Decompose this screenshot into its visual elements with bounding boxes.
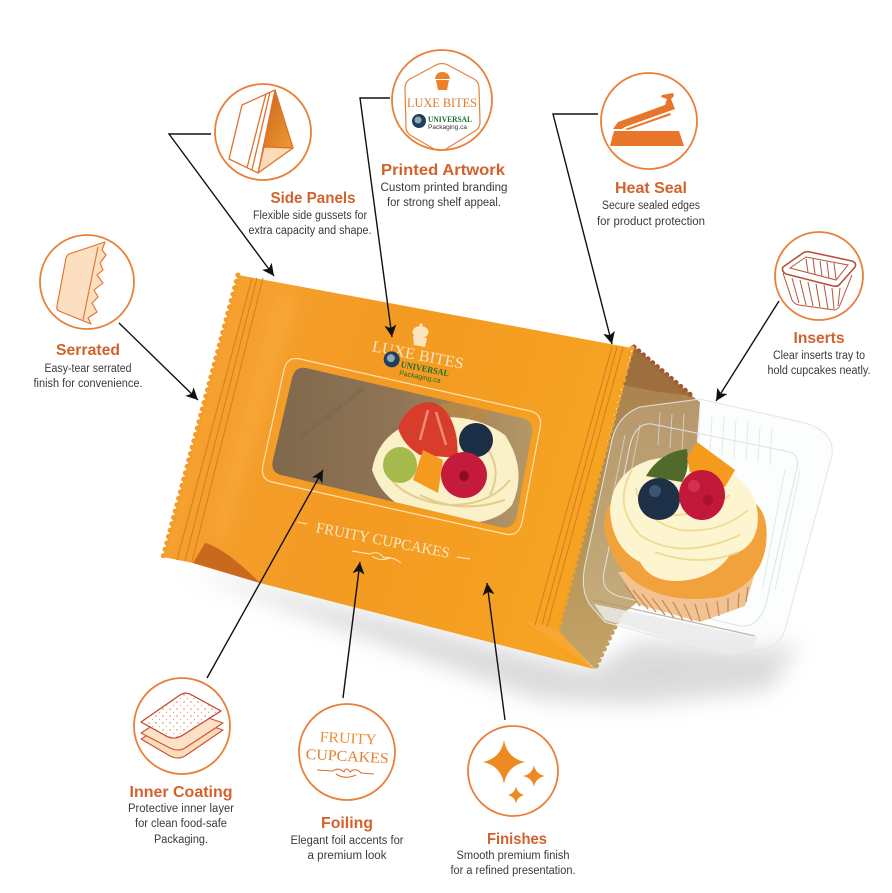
icon: label: UNIVERSAL: [428, 115, 472, 124]
bag universal logo: [381, 350, 451, 386]
description: for clean food-safe: [135, 818, 227, 830]
raspberry: [679, 470, 725, 520]
description: Flexible side gussets for: [253, 210, 367, 222]
bag universal logo: Packaging.ca: [398, 370, 441, 385]
product: bag and tray illustration: [163, 275, 832, 705]
description: Smooth premium finish: [456, 850, 570, 862]
description: for strong shelf appeal.: [387, 197, 501, 209]
icon circle: [392, 50, 492, 150]
bag flourish: [352, 551, 401, 563]
description: Packaging.: [154, 834, 208, 846]
folded corner left: [193, 543, 260, 583]
window: [272, 368, 532, 528]
callout: Serrated: [34, 235, 142, 390]
callout: Inserts: [768, 232, 870, 377]
bag universal logo: UNIVERSAL: [400, 359, 450, 378]
arrow: side panels: [169, 134, 274, 276]
icon circle: [40, 235, 134, 329]
description: Elegant foil accents for: [290, 835, 404, 847]
icon: side gusset: [229, 90, 293, 173]
icon circle: [468, 726, 558, 816]
description: Easy-tear serrated: [44, 363, 132, 375]
heading: Inserts: [794, 330, 845, 347]
callout: Printed Artwork: [380, 50, 508, 209]
icon circle: [134, 678, 230, 774]
wrapper: [618, 566, 757, 622]
icon: label: LUXE BITES: [407, 96, 477, 110]
heading: Heat Seal: [615, 180, 687, 197]
icon circle: [215, 84, 311, 180]
arrow: finishes: [487, 583, 505, 720]
grape: [383, 447, 417, 483]
mango: [687, 442, 735, 487]
folded corner right: [520, 618, 594, 669]
heading: Serrated: [56, 342, 120, 359]
description: for product protection: [597, 216, 705, 228]
description: for a refined presentation.: [450, 865, 576, 877]
serrated left edge: [163, 275, 238, 557]
heading: Foiling: [321, 815, 373, 832]
icon: foil text: FRUITY: [319, 730, 377, 748]
description: Secure sealed edges: [602, 200, 700, 212]
blueberry: [638, 478, 680, 520]
soft highlight: [210, 290, 300, 540]
icon: sparkles: [483, 740, 545, 804]
arrow: foiling: [343, 562, 360, 698]
window frame line: [262, 358, 541, 534]
icon: tray: [782, 252, 856, 310]
icon: foil text: [305, 730, 389, 777]
icon: layers: [141, 693, 223, 758]
cupcake in tray: [604, 442, 767, 622]
heading: Side Panels: [270, 190, 356, 207]
icon: label: Packaging.ca: [428, 124, 467, 131]
icon circle: [775, 232, 863, 320]
right seal lines: [535, 347, 623, 627]
bag product name: FRUITY CUPCAKES: [314, 520, 451, 562]
description: Protective inner layer: [128, 803, 234, 815]
icon: serrated edge: [57, 242, 106, 324]
description: Custom printed branding: [380, 182, 508, 194]
blueberry: [459, 423, 493, 457]
mango: [413, 450, 443, 493]
embossed inner text: cupcake cupcake cupcake: [296, 383, 367, 442]
arrow: printed artwork: [360, 98, 392, 337]
description: finish for convenience.: [34, 378, 142, 390]
strawberry: [398, 402, 458, 458]
heading: Inner Coating: [130, 784, 232, 801]
arrow: serrated: [119, 323, 198, 400]
callout: Inner Coating: [128, 678, 234, 846]
icon circle: [601, 73, 697, 169]
bag brand text: LUXE BITES: [371, 338, 465, 373]
description: extra capacity and shape.: [248, 225, 372, 237]
heading: Finishes: [487, 831, 547, 848]
callout: Side Panels: [215, 84, 372, 237]
raspberry: [441, 452, 487, 498]
icon: label: [405, 64, 480, 150]
arrow: inserts: [716, 301, 779, 401]
clear plastic tray: [583, 399, 832, 657]
kiwi: [646, 449, 688, 482]
ground shadow: [185, 568, 800, 705]
heading: Printed Artwork: [381, 162, 505, 179]
callout: Heat Seal: [597, 73, 705, 228]
description: hold cupcakes neatly.: [768, 365, 870, 377]
icon: heat sealer: [610, 93, 684, 146]
icon: foil text: CUPCAKES: [305, 747, 389, 767]
arrow: heat seal: [553, 114, 612, 344]
callout: Finishes: [450, 726, 576, 877]
description: Clear inserts tray to: [773, 350, 865, 362]
bag cupcake logo: [412, 324, 428, 347]
frosting in window: [372, 417, 519, 523]
callout: Foiling: [290, 704, 404, 862]
bag gold interior flap: [556, 347, 700, 669]
icon circle: [299, 704, 395, 800]
left seal lines: [177, 278, 263, 562]
arrow: inner coating: [207, 470, 323, 678]
frosting: [610, 457, 758, 581]
description: a premium look: [308, 850, 387, 862]
serrated right edge: [558, 348, 632, 630]
bag front panel: [163, 275, 632, 669]
cake: [604, 497, 767, 599]
